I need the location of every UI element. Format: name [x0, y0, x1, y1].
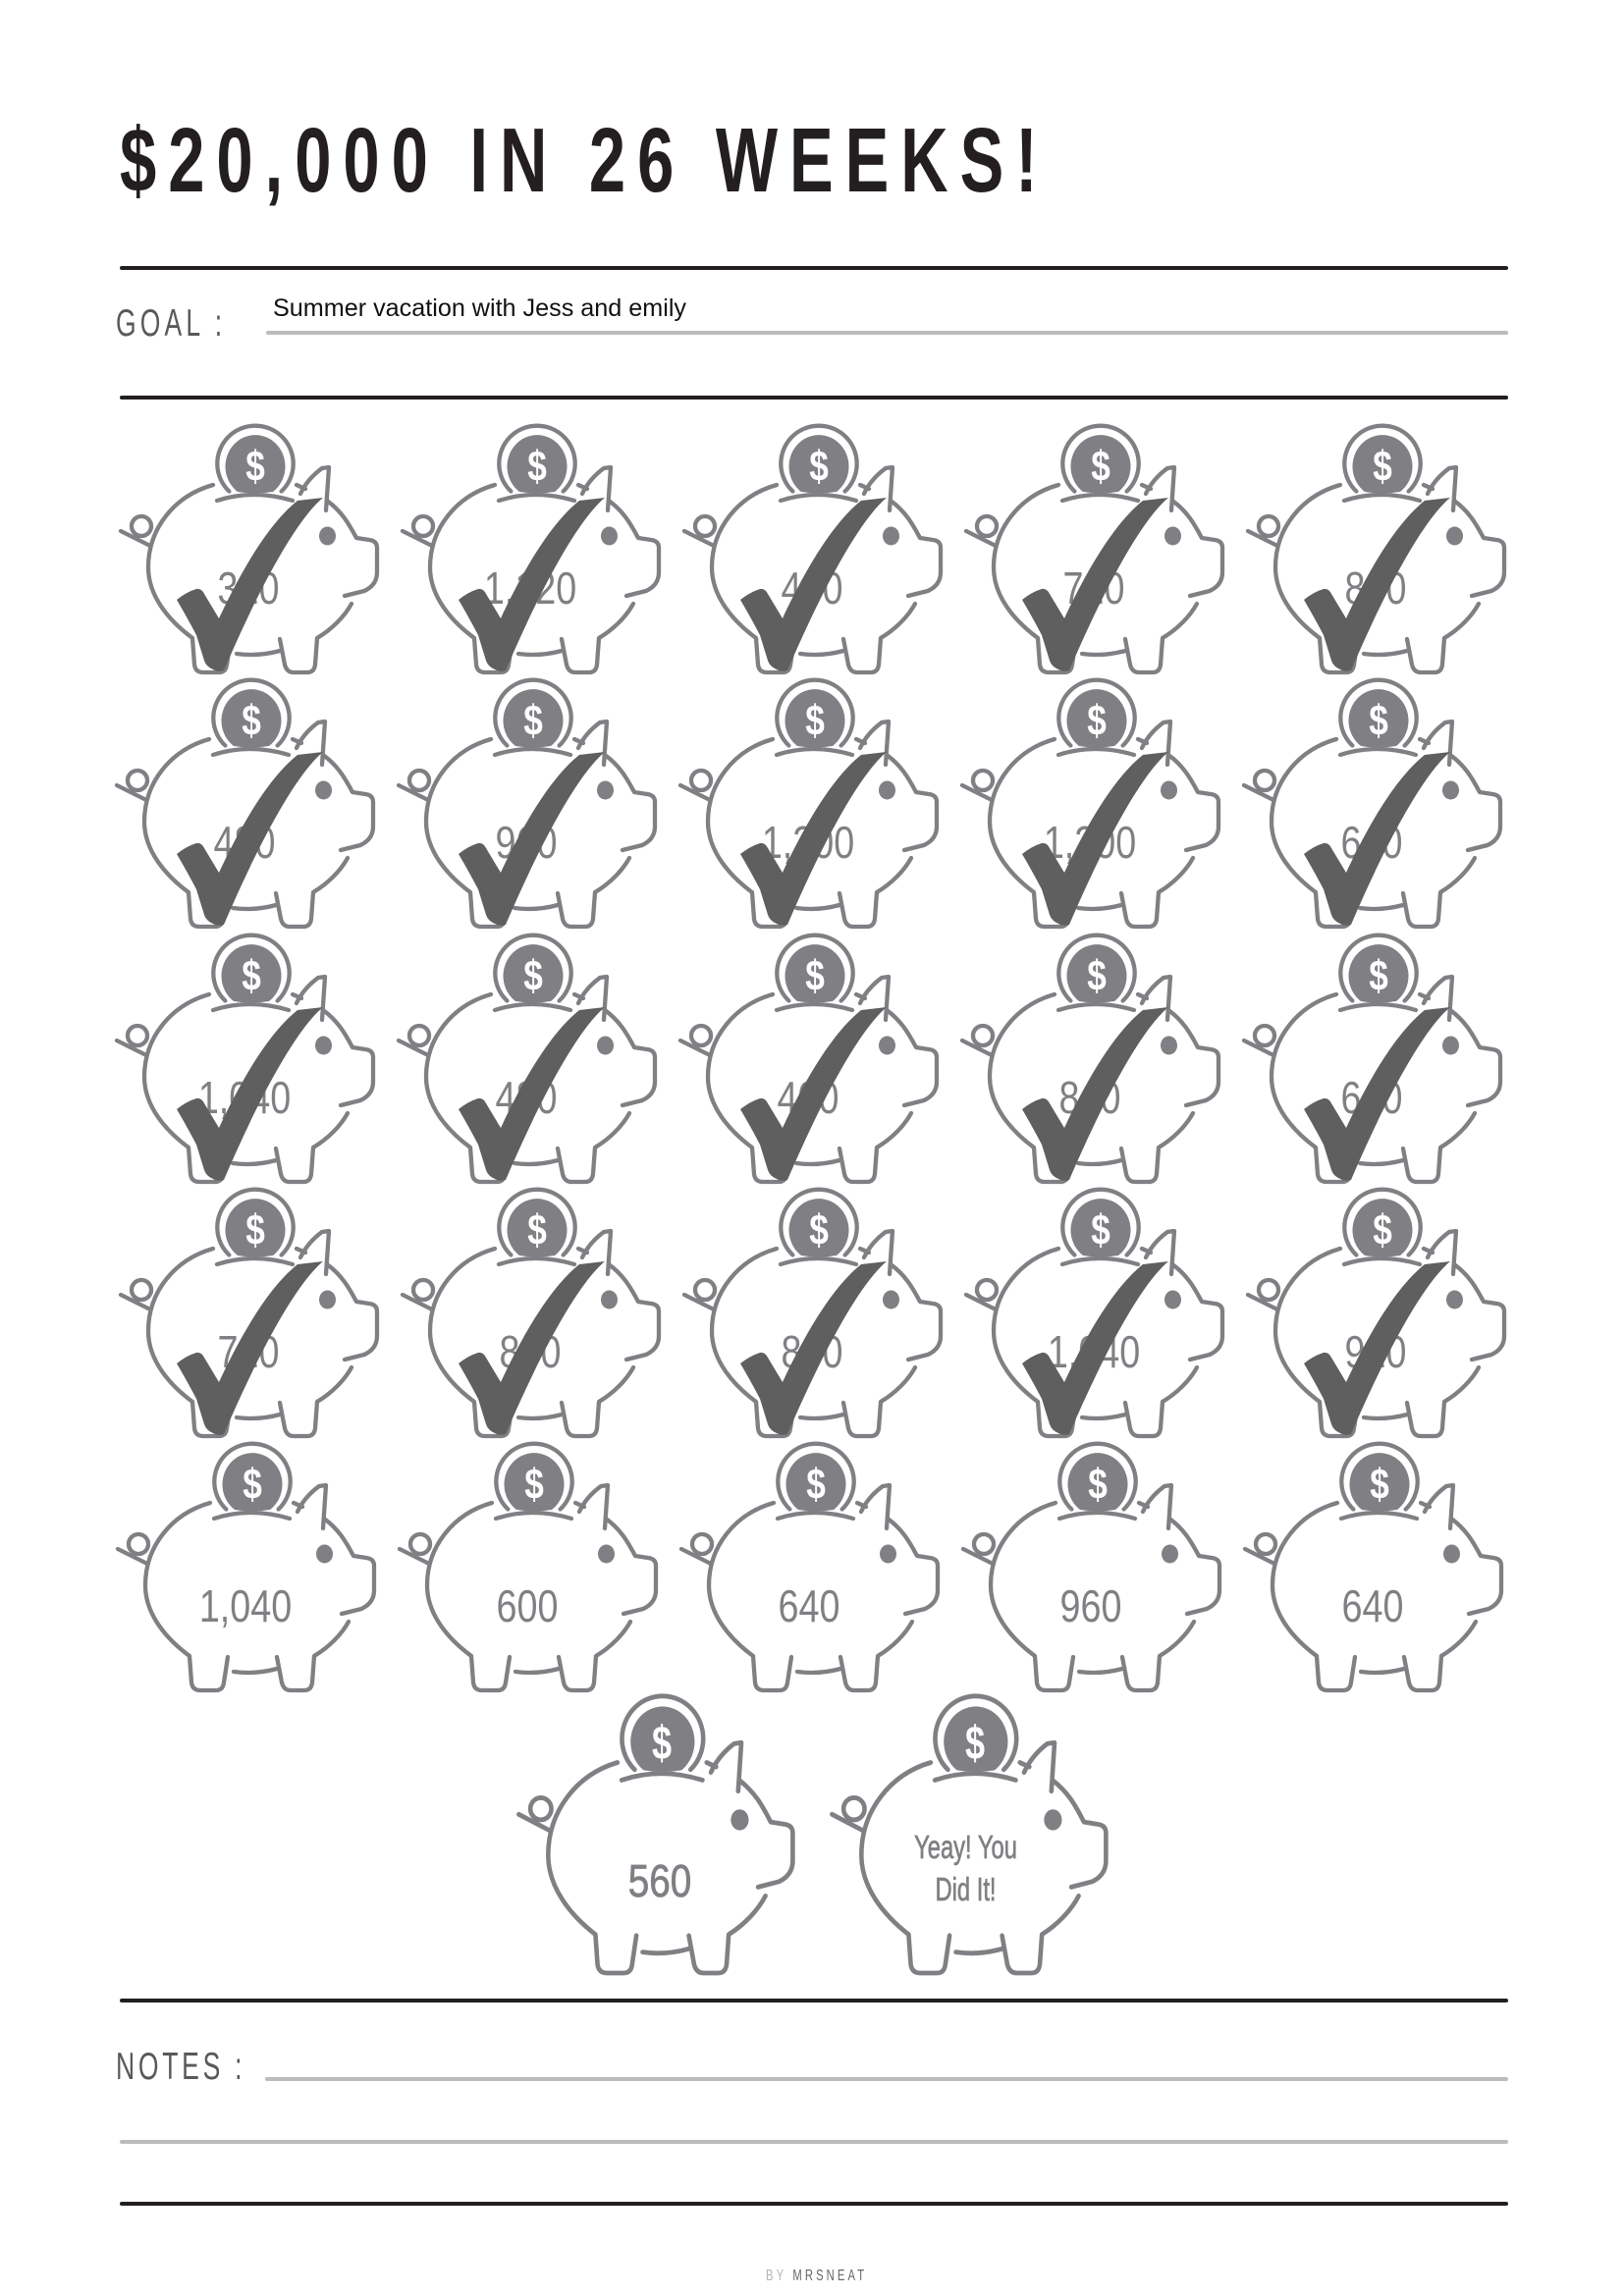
pig week 7: 960	[496, 817, 557, 868]
pig week 6: 480	[214, 817, 275, 868]
pig week 10	[1244, 680, 1500, 927]
pig week 11: $	[242, 952, 261, 1000]
pig week 16	[121, 1190, 377, 1436]
check row 4	[177, 1261, 1450, 1435]
pig week 23	[681, 1444, 938, 1690]
pig week 11	[117, 935, 373, 1182]
pig week 14	[962, 935, 1218, 1182]
pig week 9	[962, 680, 1218, 927]
pig week 13	[680, 935, 937, 1182]
pig week 14: 840	[1059, 1072, 1120, 1123]
goal bottom rule	[120, 396, 1508, 400]
title: $20,000 IN 26 WEEKS!	[120, 110, 1038, 212]
check row 2	[177, 752, 1450, 926]
pig week 8: $	[805, 697, 825, 745]
pig week 26: $	[652, 1717, 672, 1770]
pig week 12	[399, 935, 655, 1182]
pig week 12: 480	[496, 1072, 557, 1123]
pig week 10: 640	[1341, 817, 1402, 868]
pig week 20	[1248, 1190, 1504, 1436]
pig week 12: $	[523, 952, 543, 1000]
goal top rule	[120, 266, 1508, 270]
pig week 22: $	[524, 1461, 544, 1509]
pig week 18	[684, 1190, 941, 1436]
pig week 6	[117, 680, 373, 927]
pig week 5: 840	[1345, 562, 1406, 614]
pig week 24: 960	[1060, 1580, 1121, 1631]
pig week 16: $	[245, 1206, 265, 1255]
check row 3	[177, 1007, 1450, 1181]
pig week 18: $	[809, 1206, 829, 1255]
pig week 19	[966, 1190, 1222, 1436]
pig week 5: $	[1373, 443, 1392, 491]
pig final: Yeay! You Did It!: $	[965, 1717, 985, 1770]
goal label: GOAL :	[116, 302, 222, 345]
check row 1	[177, 498, 1450, 671]
pig week 26: 560	[628, 1856, 691, 1906]
pig week 20: 920	[1345, 1326, 1406, 1377]
pig week 19: $	[1091, 1206, 1110, 1255]
pig week 4: 720	[1063, 562, 1124, 614]
pig week 15: 640	[1341, 1072, 1402, 1123]
pig week 7: $	[523, 697, 543, 745]
checkmarks	[177, 498, 1450, 1435]
footer credit: BY MRSNEAT	[766, 2266, 865, 2283]
goal line	[266, 331, 1508, 335]
pig week 21: $	[243, 1461, 262, 1509]
pig week 4: $	[1091, 443, 1110, 491]
pig week 5	[1248, 426, 1504, 672]
pig week 22	[400, 1444, 656, 1690]
pig week 7	[399, 680, 655, 927]
notes top rule	[120, 1999, 1508, 2002]
pig week 8	[680, 680, 937, 927]
pig week 19: 1,040	[1048, 1326, 1140, 1377]
pig week 8: 1,200	[762, 817, 854, 868]
pig week 25: 640	[1342, 1580, 1403, 1631]
pig week 24: $	[1088, 1461, 1108, 1509]
goal text: Summer vacation with Jess and emily	[273, 294, 686, 322]
pig week 21	[118, 1444, 374, 1690]
pig week 6: $	[242, 697, 261, 745]
notes label: NOTES :	[116, 2046, 243, 2088]
pig week 14: $	[1087, 952, 1107, 1000]
pig week 20: $	[1373, 1206, 1392, 1255]
pig week 21: 1,040	[199, 1580, 292, 1631]
piggy bank grid	[117, 426, 1504, 1973]
pig week 15: $	[1369, 952, 1388, 1000]
pig final: Yeay! You Did It!	[832, 1696, 1106, 1973]
pig week 3: 480	[782, 562, 842, 614]
pig week 3	[684, 426, 941, 672]
pig week 3: $	[809, 443, 829, 491]
pig week 1	[121, 426, 377, 672]
pig week 25: $	[1370, 1461, 1389, 1509]
pig week 13: $	[805, 952, 825, 1000]
pig week 10: $	[1369, 697, 1388, 745]
notes line 2	[120, 2140, 1508, 2144]
pig week 2: 1,120	[484, 562, 576, 614]
pig week 2	[403, 426, 659, 672]
pig week 9: 1,200	[1044, 817, 1136, 868]
pig week 4	[966, 426, 1222, 672]
pig week 23: 640	[779, 1580, 839, 1631]
pig week 17: $	[527, 1206, 547, 1255]
pig week 2: $	[527, 443, 547, 491]
notes bottom rule	[120, 2202, 1508, 2206]
pig week 1: 320	[218, 562, 279, 614]
notes line 1	[265, 2077, 1508, 2081]
pig week 11: 1,040	[198, 1072, 291, 1123]
pig week 17	[403, 1190, 659, 1436]
pig week 26	[518, 1696, 792, 1973]
pig final: Yeay! You Did It!: Did It!	[935, 1872, 997, 1908]
pig week 24	[963, 1444, 1219, 1690]
pig week 25	[1245, 1444, 1501, 1690]
pig final: Yeay! You Did It!: Yeay! You	[914, 1830, 1017, 1866]
pig week 22: 600	[497, 1580, 558, 1631]
pig week 17: 840	[500, 1326, 561, 1377]
pig week 23: $	[806, 1461, 826, 1509]
pig week 15	[1244, 935, 1500, 1182]
pig week 13: 400	[778, 1072, 839, 1123]
pig week 18: 800	[782, 1326, 842, 1377]
pig week 1: $	[245, 443, 265, 491]
pig week 9: $	[1087, 697, 1107, 745]
pig week 16: 720	[218, 1326, 279, 1377]
